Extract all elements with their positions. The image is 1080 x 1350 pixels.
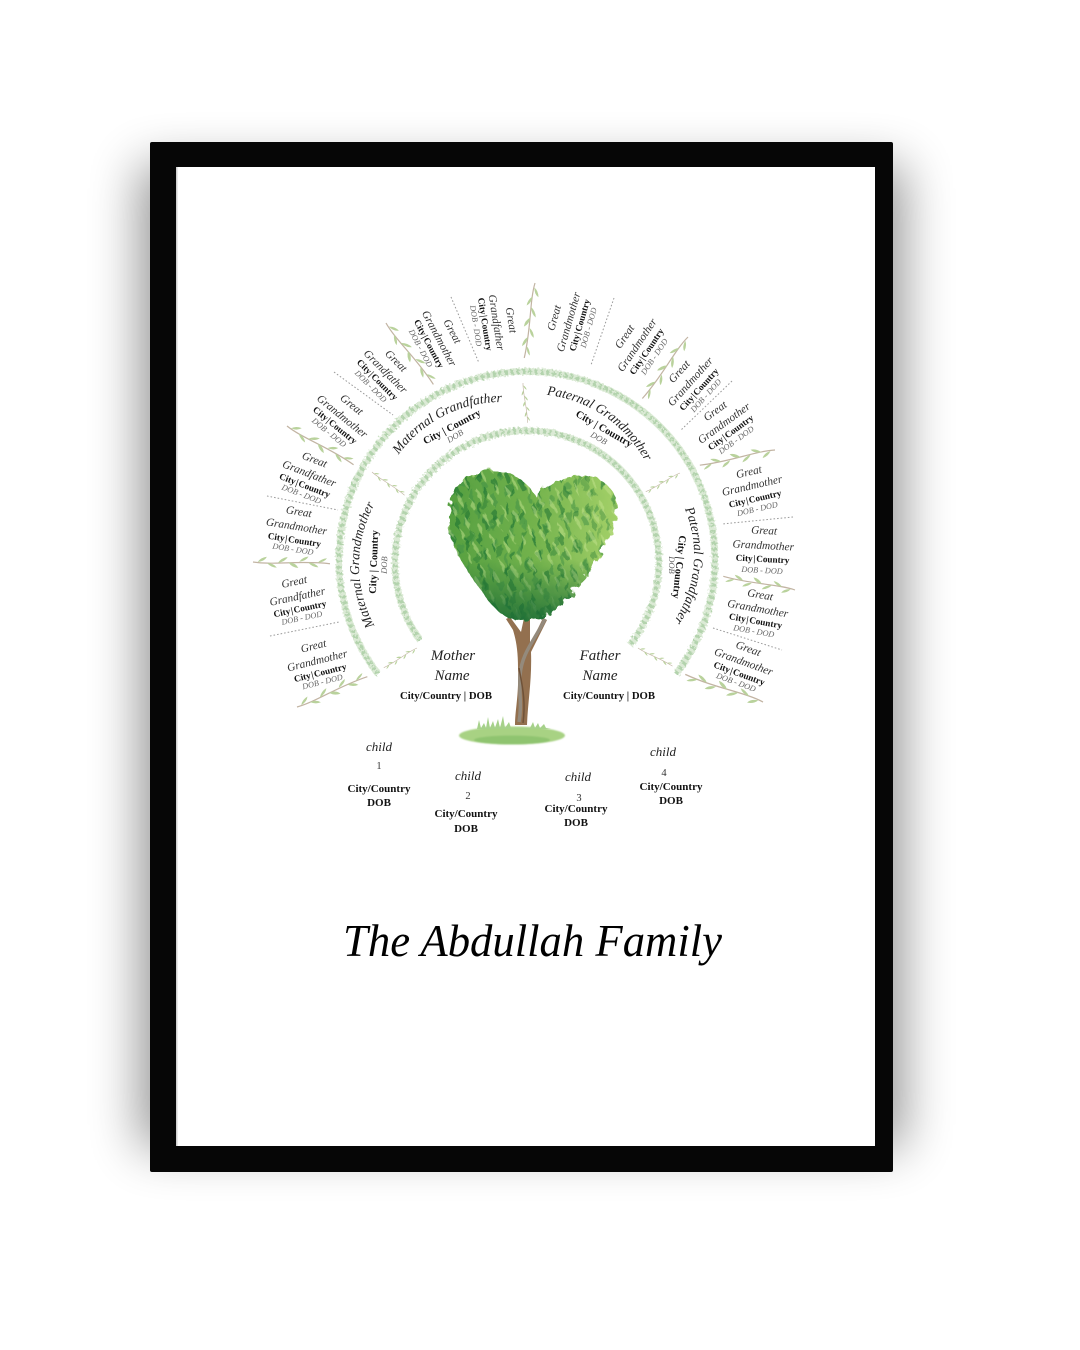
- great grandmother 16: Grandmother: [712, 646, 775, 679]
- great grandmother 11: City | Country: [677, 366, 721, 413]
- paternal grandfather: DOB: [667, 555, 677, 574]
- great grandmother 7: DOB - DOD: [406, 327, 434, 369]
- great grandmother 16: City | Country: [712, 660, 767, 688]
- maternal grandfather: DOB: [444, 427, 465, 445]
- great grandmother 5: Great: [337, 392, 366, 418]
- great grandmother 13: City | Country: [728, 488, 783, 510]
- grandparents ring: [350, 386, 704, 628]
- mother block: Mother: [430, 648, 475, 664]
- great grandmother 9: DOB - DOD: [579, 307, 599, 350]
- great grandfather 6: [347, 337, 420, 410]
- great grandfather 6: City | Country: [355, 357, 400, 402]
- great grandfather 4: DOB - DOD: [280, 482, 322, 506]
- great grandmother 13: DOB - DOD: [735, 500, 779, 518]
- child 4: DOB: [659, 795, 684, 807]
- child 2: child: [455, 768, 481, 783]
- great-grandparents ring: [262, 286, 796, 697]
- great grandmother 5: [302, 381, 379, 456]
- great grandmother 11: DOB - DOD: [688, 377, 723, 415]
- child 1: child: [366, 739, 392, 754]
- great grandmother 7: Grandmother: [419, 309, 459, 369]
- great grandmother 14: Great: [751, 524, 778, 538]
- great grandfather 6: Great: [382, 348, 410, 375]
- great grandfather 2: Grandfather: [268, 585, 327, 609]
- great grandmother 15: DOB - DOD: [732, 623, 775, 639]
- great grandmother 5: DOB - DOD: [309, 415, 348, 449]
- dotted dividers: [267, 297, 793, 650]
- paternal grandfather: Paternal Grandfather: [676, 507, 704, 624]
- great grandfather 2: [265, 571, 331, 628]
- great grandmother 9: Grandmother: [555, 290, 584, 353]
- child 4: 4: [661, 768, 667, 779]
- great grandmother 7: Great: [441, 317, 464, 347]
- great grandmother 5: City | Country: [311, 404, 359, 446]
- great grandmother 3: City | Country: [267, 531, 322, 549]
- great grandfather 2: City | Country: [273, 598, 328, 619]
- great grandfather 6: Grandfather: [361, 348, 410, 397]
- great grandmother 13: Great: [735, 464, 764, 481]
- great grandmother 3: [262, 501, 331, 559]
- great grandmother 16: Great: [734, 639, 763, 659]
- great grandmother 3: Great: [285, 504, 313, 520]
- great grandmother 14: DOB - DOD: [740, 565, 783, 576]
- great grandmother 7: [402, 302, 472, 378]
- great grandmother 12: City | Country: [706, 412, 756, 452]
- heart crown: [448, 470, 617, 620]
- great grandmother 10: Grandmother: [615, 316, 660, 374]
- child 4: [640, 744, 703, 807]
- great grandfather 6: DOB - DOD: [352, 368, 388, 404]
- great grandmother 9: City | Country: [567, 298, 592, 352]
- great grandmother 14: City | Country: [736, 553, 790, 565]
- father block: Name: [582, 668, 618, 684]
- title: The Abdullah Family: [343, 916, 722, 966]
- father block: [563, 648, 655, 702]
- child 1: City/Country: [348, 783, 411, 795]
- child 1: [348, 739, 411, 809]
- mother block: Name: [434, 668, 470, 684]
- great grandmother 10: City | Country: [627, 326, 666, 377]
- great grandmother 15: Great: [746, 587, 775, 604]
- great grandmother 12: [687, 388, 764, 462]
- great grandmother 14: [731, 523, 796, 577]
- maternal grandmother: [350, 502, 389, 628]
- child 3: [545, 769, 608, 829]
- great grandfather 4: Grandfather: [281, 458, 338, 490]
- great grandmother 11: [655, 345, 730, 422]
- great grandmother 15: Grandmother: [726, 598, 790, 620]
- great grandmother 9: [540, 286, 602, 359]
- child 3: City/Country: [545, 803, 608, 815]
- mother block: City/Country | DOB: [400, 690, 492, 702]
- great grandfather 8: City | Country: [476, 297, 494, 352]
- great grandmother 9: Great: [545, 303, 564, 332]
- child 3: child: [565, 769, 591, 784]
- paternal grandfather: City | Country: [670, 535, 687, 600]
- child 4: child: [650, 744, 676, 759]
- great grandmother 10: DOB - DOD: [639, 337, 670, 377]
- father block: City/Country | DOB: [563, 690, 655, 702]
- grass: [477, 716, 551, 729]
- great grandfather 2: Great: [280, 574, 309, 591]
- great grandmother 16: [706, 633, 780, 697]
- great grandfather 8: Great: [503, 306, 519, 335]
- great grandmother 11: Great: [666, 358, 693, 386]
- child 3: DOB: [564, 817, 589, 829]
- outer leaf arc: [339, 371, 715, 674]
- maternal grandmother: City | Country: [368, 529, 381, 594]
- great grandmother 12: Great: [701, 398, 730, 424]
- great grandfather 4: [273, 444, 344, 509]
- great grandmother 15: City | Country: [728, 611, 783, 631]
- paternal grandmother: Paternal Grandmother: [546, 386, 651, 459]
- great grandmother 10: [603, 308, 676, 385]
- great grandmother 1: City | Country: [293, 661, 348, 684]
- great grandmother 3: DOB - DOD: [271, 541, 314, 557]
- great grandfather 2: DOB - DOD: [280, 609, 323, 627]
- great grandmother 11: Grandmother: [666, 355, 716, 409]
- mother block: [400, 648, 492, 702]
- great grandfather 8: Grandfather: [486, 294, 506, 352]
- child 2: [435, 768, 498, 835]
- great grandmother 14: Grandmother: [732, 538, 795, 554]
- great grandfather 8: [467, 291, 521, 355]
- child 3: 3: [576, 793, 582, 804]
- great grandmother 12: Grandmother: [696, 400, 753, 447]
- great grandmother 3: Grandmother: [265, 516, 328, 538]
- heart tree illustration: [448, 470, 617, 744]
- maternal grandfather: Maternal Grandfather: [392, 394, 502, 455]
- great grandfather 4: City | Country: [278, 471, 332, 500]
- child 1: 1: [376, 761, 382, 772]
- child 4: City/Country: [640, 781, 703, 793]
- great grandmother 13: Grandmother: [721, 473, 784, 499]
- maternal grandmother: Maternal Grandmother: [350, 502, 374, 628]
- sprigs: [253, 282, 796, 712]
- great grandmother 5: Grandmother: [314, 393, 370, 441]
- child 2: City/Country: [435, 808, 498, 820]
- great grandmother 15: [723, 584, 792, 641]
- father block: Father: [579, 648, 621, 664]
- great grandfather 4: Great: [300, 450, 330, 471]
- great grandfather 8: DOB - DOD: [468, 304, 483, 347]
- great grandmother 16: DOB - DOD: [714, 671, 757, 694]
- great grandmother 7: City | Country: [412, 318, 446, 370]
- child 1: DOB: [367, 797, 392, 809]
- paternal grandmother: DOB: [588, 429, 609, 447]
- child 2: 2: [465, 791, 471, 802]
- great grandmother 1: DOB - DOD: [300, 673, 344, 692]
- maternal grandmother: DOB: [379, 556, 389, 575]
- great grandmother 13: [718, 460, 789, 520]
- great grandmother 1: Grandmother: [286, 648, 349, 674]
- great grandmother 1: Great: [300, 637, 329, 655]
- maternal grandfather: City | Country: [422, 407, 484, 447]
- inner leaf arc: [395, 431, 659, 645]
- child 2: DOB: [454, 823, 479, 835]
- great grandmother 1: [282, 633, 354, 694]
- trunk: [506, 617, 547, 725]
- paternal grandmother: City | Country: [574, 409, 635, 450]
- great grandmother 10: Great: [613, 322, 638, 351]
- picture frame: [140, 142, 903, 1172]
- great grandmother 12: DOB - DOD: [716, 424, 756, 457]
- ground: [459, 726, 565, 744]
